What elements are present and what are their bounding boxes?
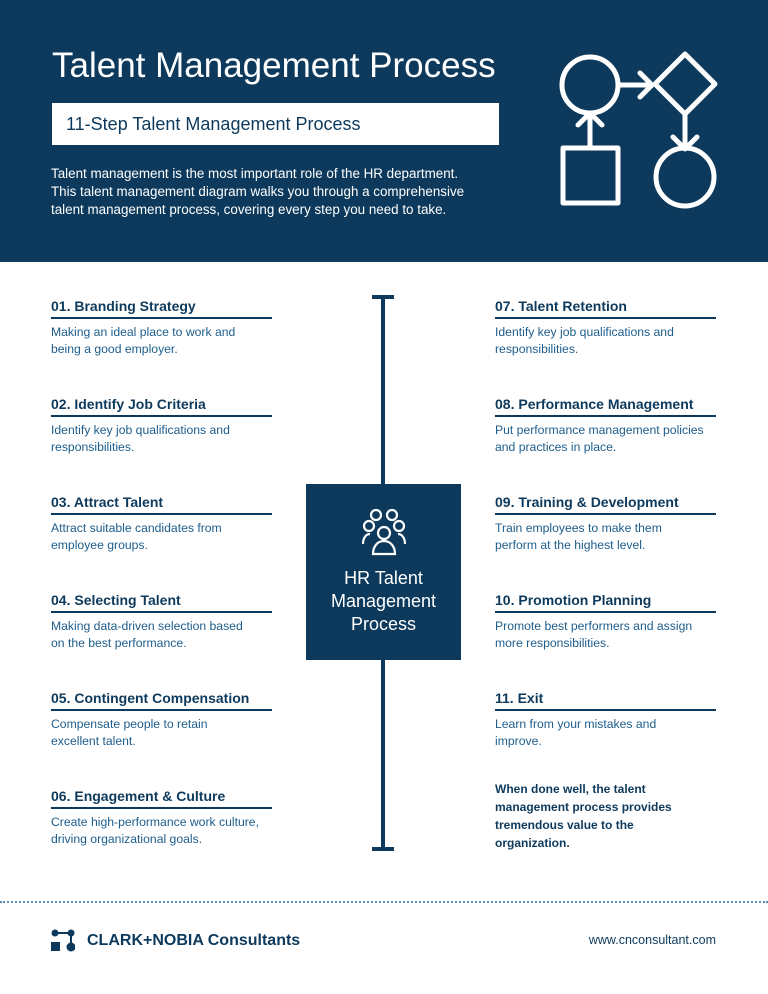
intro text: Talent management is the most important role of the HR department.	[51, 166, 458, 181]
step 04: on the best performance.	[51, 636, 186, 650]
step 06: Create high-performance work culture,	[51, 815, 259, 829]
step 11: 11. Exit	[495, 690, 543, 706]
step 11	[495, 690, 716, 748]
step 09: Train employees to make them	[495, 521, 662, 535]
footer url: www.cnconsultant.com	[589, 933, 716, 947]
step 08	[495, 396, 716, 454]
step 05: excellent talent.	[51, 734, 136, 748]
step 07: responsibilities.	[495, 342, 578, 356]
intro text: This talent management diagram walks you through a comprehensive	[51, 184, 464, 199]
header panel	[0, 0, 768, 262]
step 05: Compensate people to retain	[51, 717, 208, 731]
step 08: 08. Performance Management	[495, 396, 693, 412]
step 09	[495, 494, 716, 552]
center label	[331, 568, 436, 634]
step 02	[51, 396, 272, 454]
step 10	[495, 592, 716, 650]
icon: people group	[362, 508, 406, 556]
step 07: Identify key job qualifications and	[495, 325, 674, 339]
step 08: and practices in place.	[495, 440, 616, 454]
step 08: Put performance management policies	[495, 423, 704, 437]
intro text	[51, 166, 464, 217]
step 01: 01. Branding Strategy	[51, 298, 196, 314]
footer logo	[51, 930, 300, 952]
closing note: tremendous value to the	[495, 818, 634, 832]
step 06	[51, 788, 272, 846]
icon: flowchart	[560, 52, 718, 208]
step 01	[51, 298, 272, 356]
step 05	[51, 690, 272, 748]
step 06: 06. Engagement & Culture	[51, 788, 225, 804]
closing note	[495, 782, 672, 850]
center label: HR Talent	[344, 568, 423, 588]
step 11: Learn from your mistakes and	[495, 717, 656, 731]
center box	[306, 484, 461, 660]
intro text: talent management process, covering every step you need to take.	[51, 202, 446, 217]
step 03: 03. Attract Talent	[51, 494, 163, 510]
step 03: Attract suitable candidates from	[51, 521, 222, 535]
closing note: management process provides	[495, 800, 672, 814]
step 04: Making data-driven selection based	[51, 619, 243, 633]
subtitle box: 11-Step Talent Management Process	[66, 114, 361, 134]
step 02: Identify key job qualifications and	[51, 423, 230, 437]
step 07	[495, 298, 716, 356]
step 02: responsibilities.	[51, 440, 134, 454]
step 03	[51, 494, 272, 552]
step 04	[51, 592, 272, 650]
step 06: driving organizational goals.	[51, 832, 202, 846]
closing note: When done well, the talent	[495, 782, 646, 796]
step 09: 09. Training & Development	[495, 494, 679, 510]
step 01: Making an ideal place to work and	[51, 325, 235, 339]
center label: Management	[331, 591, 436, 611]
step 10: more responsibilities.	[495, 636, 609, 650]
step 02: 02. Identify Job Criteria	[51, 396, 206, 412]
step 11: improve.	[495, 734, 542, 748]
company name: CLARK+NOBIA Consultants	[87, 932, 300, 949]
subtitle box	[52, 103, 499, 145]
center label: Process	[351, 614, 416, 634]
closing note: organization.	[495, 836, 570, 850]
step 07: 07. Talent Retention	[495, 298, 627, 314]
step 05: 05. Contingent Compensation	[51, 690, 249, 706]
step 01: being a good employer.	[51, 342, 178, 356]
title: Talent Management Process	[52, 46, 496, 85]
step 10: Promote best performers and assign	[495, 619, 692, 633]
step 10: 10. Promotion Planning	[495, 592, 651, 608]
icon: logo mark	[51, 930, 75, 952]
step 03: employee groups.	[51, 538, 148, 552]
step 09: perform at the highest level.	[495, 538, 645, 552]
step 04: 04. Selecting Talent	[51, 592, 181, 608]
center timeline line	[372, 295, 394, 851]
